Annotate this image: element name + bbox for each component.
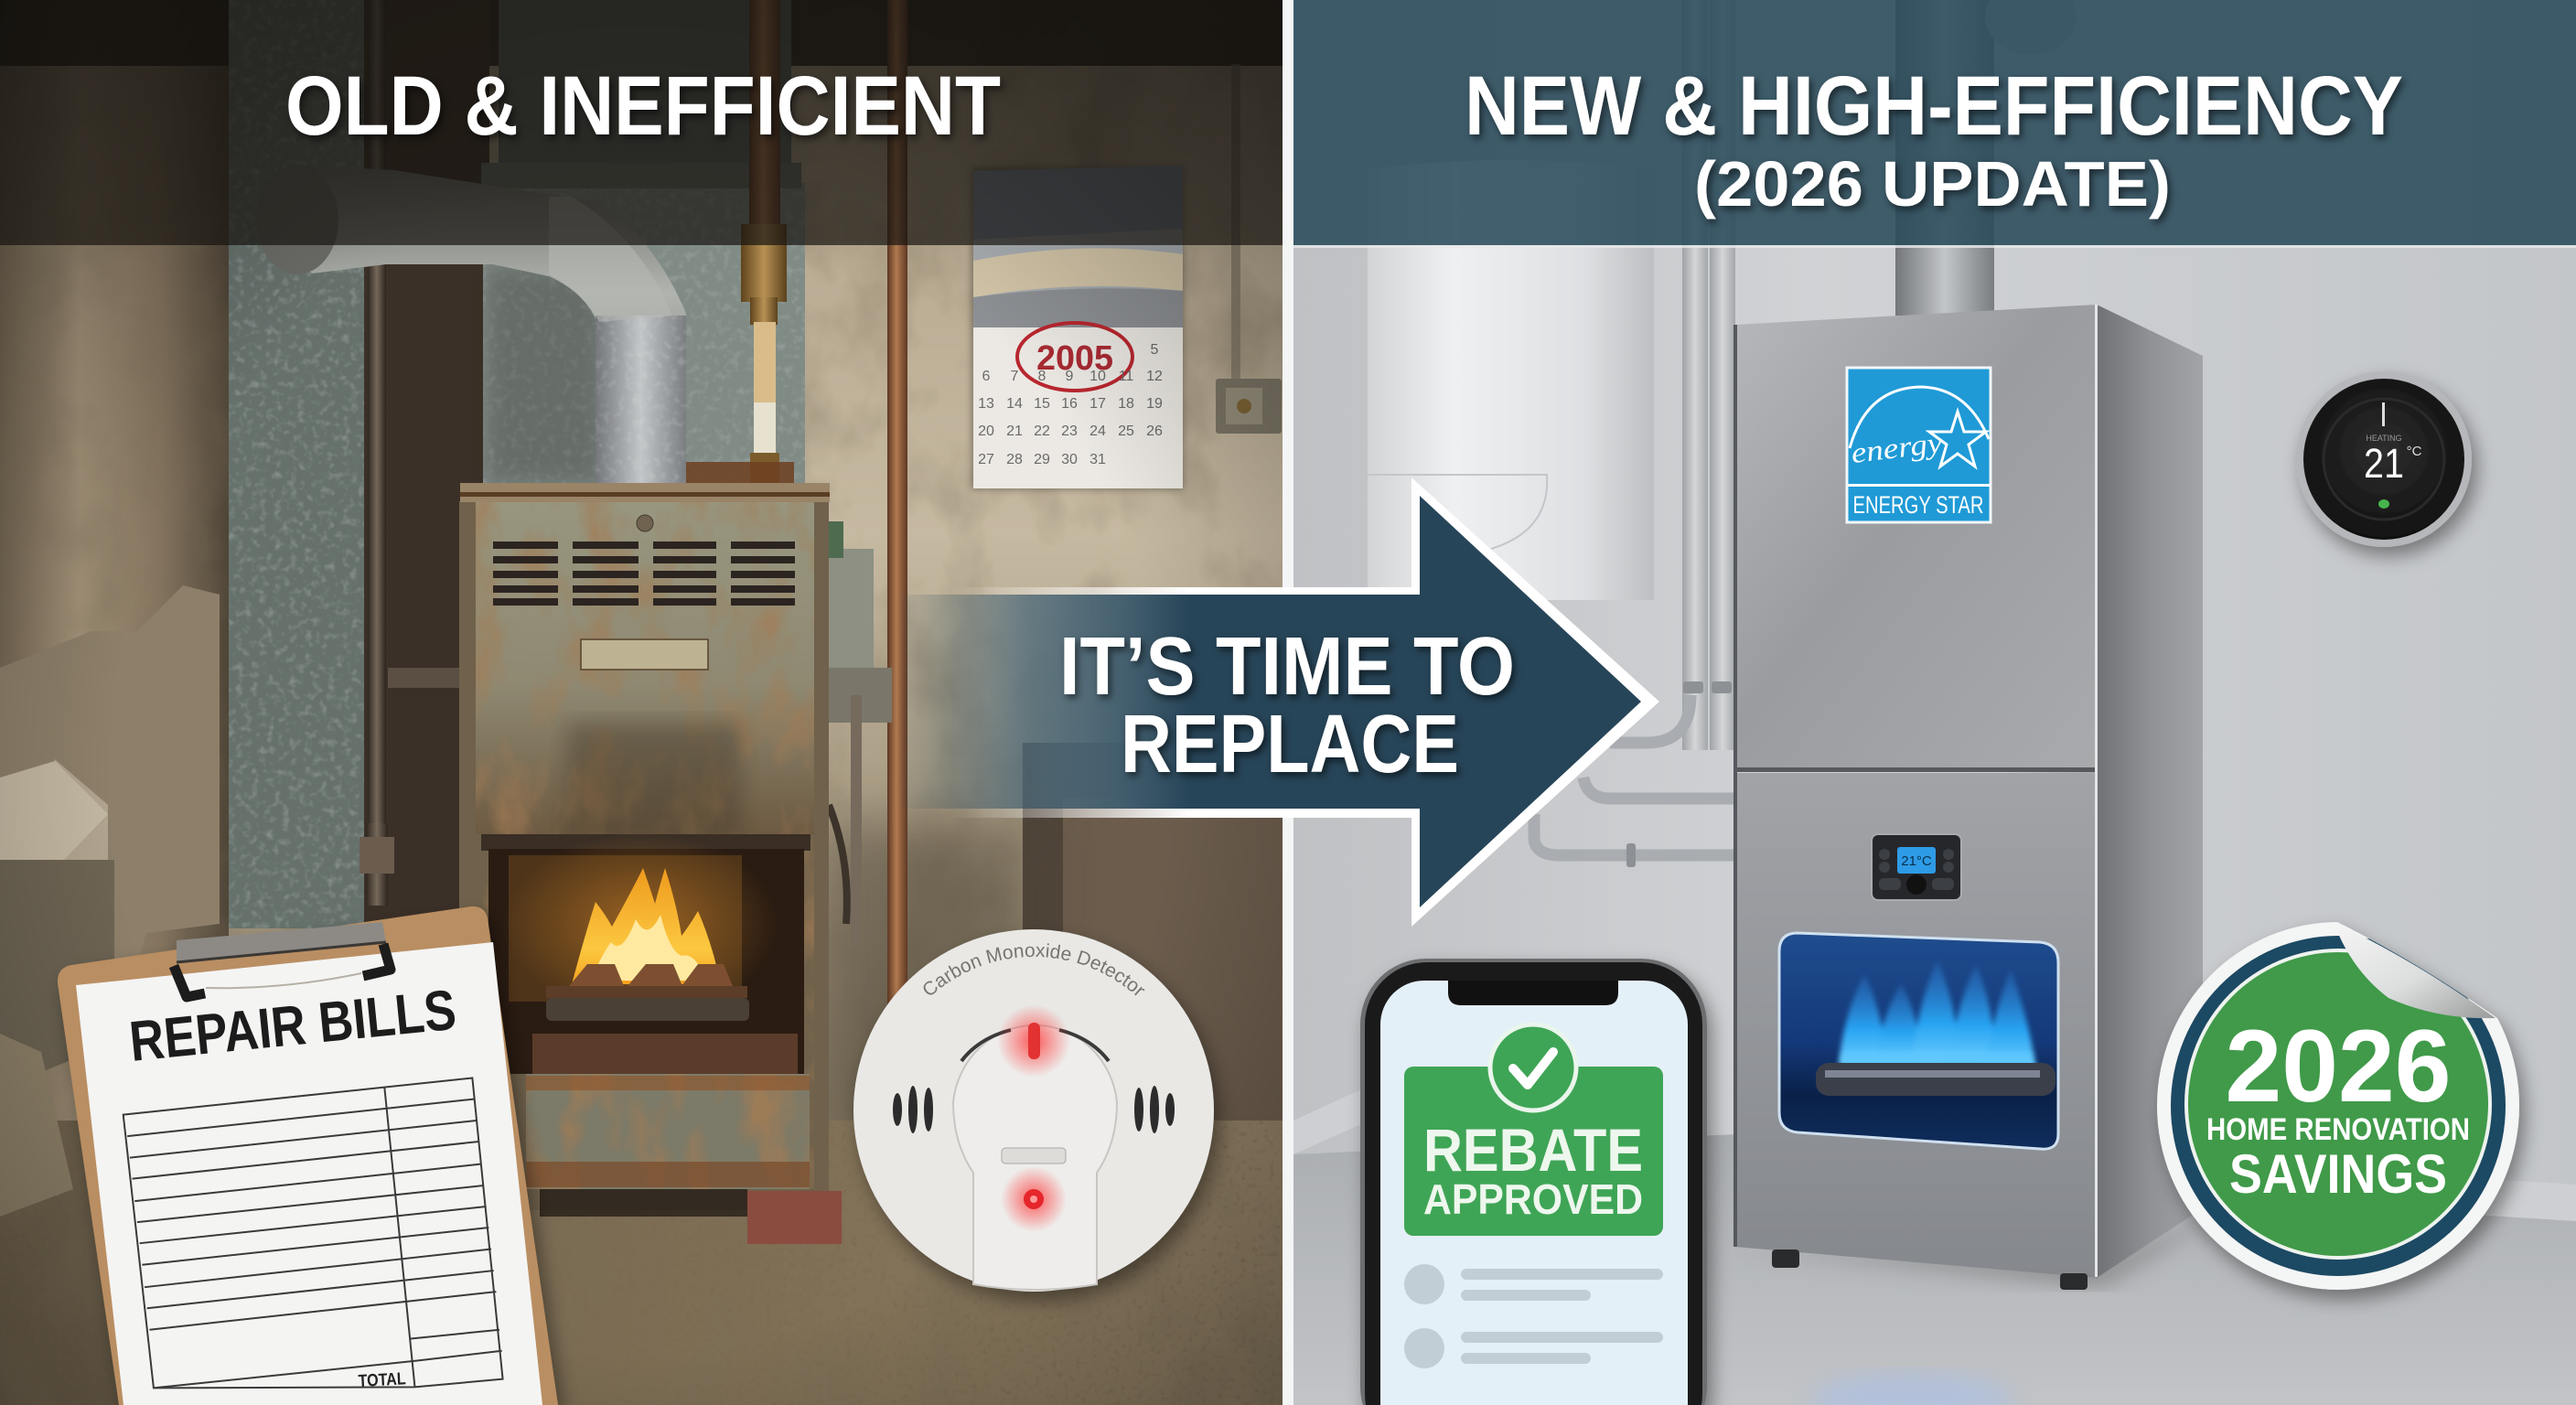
wall calendar bbox=[971, 166, 1183, 489]
Energy Star label: ENERGY STAR bbox=[1853, 491, 1983, 519]
lower furnace panel bbox=[526, 1074, 810, 1189]
calendar numbers: 5 bbox=[1151, 342, 1159, 358]
invoice table bbox=[123, 1078, 503, 1388]
gas burner tube bbox=[1816, 1063, 2055, 1096]
calendar numbers: 26 bbox=[1146, 424, 1163, 439]
basement wall bbox=[229, 66, 1283, 1121]
phone screen bbox=[1380, 981, 1688, 1405]
support brick bbox=[747, 1191, 842, 1244]
calendar numbers: 8 bbox=[1038, 369, 1046, 384]
calendar numbers: 20 bbox=[978, 424, 994, 439]
vertical wall pipes bbox=[1682, 0, 1735, 750]
title: new and high-efficiency: NEW & HIGH-EFFICIENCY bbox=[1465, 59, 2403, 153]
calendar numbers: 31 bbox=[1089, 452, 1106, 467]
polished floor bbox=[1293, 1134, 2576, 1405]
furnace feet bbox=[1772, 1249, 2088, 1290]
burner bars bbox=[532, 964, 798, 1074]
baseboard bbox=[1293, 1089, 2576, 1221]
detector test button bbox=[1002, 1148, 1066, 1164]
subtitle: 2026 update: (2026 UPDATE) bbox=[1694, 148, 2171, 220]
side control box bbox=[819, 521, 892, 942]
rebate smartphone bbox=[1360, 959, 1707, 1405]
detector label: Carbon Monoxide Detector bbox=[924, 943, 1145, 995]
central arrow: REPLACE bbox=[1121, 699, 1459, 790]
lower pipe fitting bbox=[360, 668, 479, 906]
header band: left bbox=[0, 0, 1283, 245]
metal clip bbox=[174, 922, 391, 997]
sheet metal plenum bbox=[481, 0, 805, 494]
detector vents bbox=[893, 1086, 1175, 1133]
furnace shadow bbox=[1738, 1217, 2214, 1285]
orange flame bbox=[572, 868, 721, 984]
calendar numbers: 16 bbox=[1061, 396, 1078, 412]
horizontal wall pipes bbox=[1534, 695, 1735, 855]
rebate approved card: REBATE bbox=[1423, 1116, 1643, 1184]
calendar numbers bbox=[978, 342, 1163, 467]
alarm light top bbox=[997, 1004, 1070, 1078]
central arrow bbox=[901, 477, 1659, 927]
calendar numbers: 12 bbox=[1146, 369, 1163, 384]
arrow text: IT’S TIME TO bbox=[1059, 621, 1515, 713]
2026 savings sticker: 2026 bbox=[2225, 1009, 2452, 1123]
calendar numbers: 24 bbox=[1089, 424, 1106, 439]
Energy Star label bbox=[1847, 368, 1991, 522]
carbon monoxide detector bbox=[851, 929, 1228, 1309]
electrical box bbox=[1216, 64, 1282, 434]
phone notch bbox=[1448, 981, 1618, 1005]
calendar numbers: 23 bbox=[1061, 424, 1078, 439]
smart thermostat: °C bbox=[2407, 444, 2422, 459]
old rusted furnace bbox=[459, 483, 892, 1244]
red circled year bbox=[1017, 323, 1132, 391]
firebox opening bbox=[481, 834, 810, 851]
title: old and inefficient: OLD & INEFFICIENT bbox=[285, 59, 1001, 153]
calendar numbers: 22 bbox=[1034, 424, 1050, 439]
calendar numbers: 10 bbox=[1089, 369, 1106, 384]
Energy Star label: energy bbox=[1849, 425, 1945, 469]
pipe clamps bbox=[1626, 681, 1732, 867]
upper front panel bbox=[1735, 305, 2097, 773]
louvre vents bbox=[493, 542, 795, 606]
calendar numbers: 30 bbox=[1061, 452, 1078, 467]
repair bills heading: REPAIR BILLS bbox=[127, 979, 459, 1074]
calendar numbers: 27 bbox=[978, 452, 994, 467]
calendar numbers: 29 bbox=[1034, 452, 1050, 467]
digital control panel: 21°C bbox=[1901, 853, 1932, 869]
vignette bbox=[0, 0, 1283, 1405]
2026 savings sticker: SAVINGS bbox=[2229, 1143, 2447, 1205]
rebate approved card bbox=[1404, 1024, 1663, 1236]
calendar numbers: 28 bbox=[1006, 452, 1023, 467]
panel: new utility room scene bbox=[1293, 0, 2576, 1405]
furnace top lid bbox=[460, 483, 830, 502]
galvanized column bbox=[229, 0, 364, 928]
header band: right bbox=[1293, 0, 2576, 248]
smart thermostat bbox=[2296, 371, 2472, 547]
flue collar ghost bbox=[1985, 0, 2077, 55]
calendar numbers: 13 bbox=[978, 396, 994, 412]
furnace side bbox=[2097, 305, 2203, 1278]
high-efficiency furnace bbox=[1733, 305, 2214, 1290]
centre divider bbox=[1283, 0, 1293, 1405]
calendar numbers: 19 bbox=[1146, 396, 1163, 412]
calendar numbers: 18 bbox=[1118, 396, 1134, 412]
paper sheet bbox=[76, 942, 542, 1405]
calendar numbers: 25 bbox=[1118, 424, 1134, 439]
rebate approved card: APPROVED bbox=[1423, 1175, 1643, 1223]
blue flames bbox=[1839, 960, 2036, 1070]
placeholder list row 2 bbox=[1404, 1328, 1663, 1368]
digital control panel bbox=[1872, 834, 1961, 900]
white wall boiler bbox=[1368, 160, 1654, 600]
stainless flue bbox=[1895, 0, 1994, 316]
calendar numbers: 14 bbox=[1006, 396, 1023, 412]
wall grime bbox=[58, 245, 1283, 814]
blue flame window bbox=[1779, 933, 2058, 1149]
centre dome bbox=[953, 1025, 1117, 1290]
2026 savings sticker bbox=[2157, 922, 2519, 1290]
left peeling wall bbox=[0, 66, 229, 1121]
alarm light bottom bbox=[1001, 1166, 1067, 1232]
panel: old basement scene bbox=[0, 0, 1283, 1405]
light grey wall bbox=[1293, 0, 2576, 1226]
dark vertical pipe bbox=[368, 0, 386, 878]
wall stain near floor bbox=[823, 823, 1034, 1134]
red circled year: 2005 bbox=[1036, 339, 1113, 378]
dark gap behind column bbox=[361, 0, 489, 924]
calendar numbers: 6 bbox=[982, 369, 991, 384]
smart thermostat: HEATING bbox=[2366, 434, 2402, 443]
lower front panel bbox=[1735, 773, 2097, 1278]
soot streak bbox=[567, 723, 741, 842]
sticker disc bbox=[2157, 922, 2519, 1290]
back right storage box bbox=[1023, 743, 1283, 1122]
ceiling shadow bbox=[0, 0, 1283, 66]
placeholder list row 1 bbox=[1404, 1264, 1663, 1304]
calendar numbers: 11 bbox=[1119, 369, 1133, 384]
copper gas pipe bbox=[686, 0, 794, 489]
calendar numbers: 21 bbox=[1006, 424, 1023, 439]
galvanized flue elbow bbox=[256, 165, 686, 484]
calendar numbers: 17 bbox=[1089, 396, 1106, 412]
furnace body bbox=[459, 501, 829, 1210]
smart thermostat: 21 bbox=[2364, 440, 2404, 487]
thin copper pipe bbox=[887, 0, 907, 1024]
stacked debris bags bbox=[0, 585, 220, 1217]
furnace rust texture bbox=[460, 483, 817, 1196]
calendar numbers: 15 bbox=[1034, 396, 1050, 412]
calendar numbers: 9 bbox=[1066, 369, 1074, 384]
clipboard board bbox=[58, 906, 558, 1405]
floor glow bbox=[1811, 1372, 2012, 1405]
2026 savings sticker: HOME RENOVATION bbox=[2206, 1112, 2470, 1147]
furnace nameplate bbox=[581, 639, 708, 670]
calendar numbers: 7 bbox=[1011, 369, 1019, 384]
concrete floor bbox=[0, 1121, 1283, 1405]
curled corner bbox=[2334, 922, 2496, 1018]
repair bills clipboard bbox=[58, 906, 558, 1405]
total label: TOTAL bbox=[358, 1369, 407, 1391]
